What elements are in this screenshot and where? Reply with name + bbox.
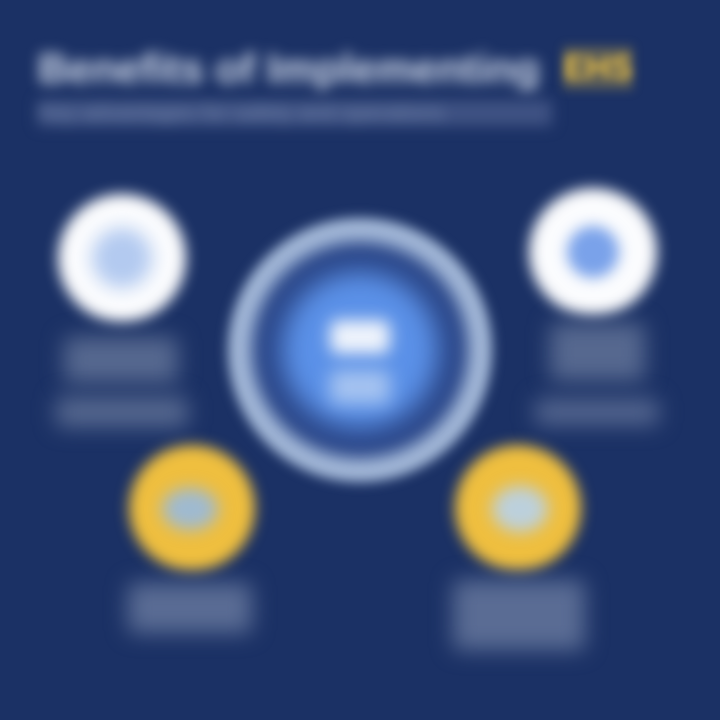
bottom right label (442, 565, 596, 662)
icon (567, 226, 619, 278)
disc (58, 194, 186, 322)
blue core (282, 272, 438, 428)
heading block (550, 323, 645, 381)
description block (535, 399, 659, 425)
outer ring (228, 218, 492, 482)
icon (492, 486, 548, 532)
icon (162, 488, 218, 530)
description block (56, 397, 188, 427)
bottom left label (116, 572, 264, 644)
icon top (330, 320, 390, 354)
left yellow circle (118, 434, 266, 580)
disc (529, 188, 657, 316)
icon (92, 228, 152, 288)
right white circle (518, 177, 668, 325)
dark inner (252, 242, 468, 458)
title highlight: EHS (563, 49, 633, 87)
right yellow circle (444, 434, 592, 580)
left white circle (47, 183, 197, 332)
right label (527, 306, 667, 436)
center circle (219, 210, 500, 490)
left label (46, 326, 198, 438)
text block (453, 580, 585, 650)
disc (455, 445, 581, 571)
title: Benefits of Implementing (38, 45, 540, 92)
disc (129, 445, 255, 571)
heading block (64, 337, 178, 383)
text block (128, 583, 252, 633)
subtitle: Key advantages for safety and operations (38, 100, 444, 125)
icon bottom (330, 370, 390, 404)
